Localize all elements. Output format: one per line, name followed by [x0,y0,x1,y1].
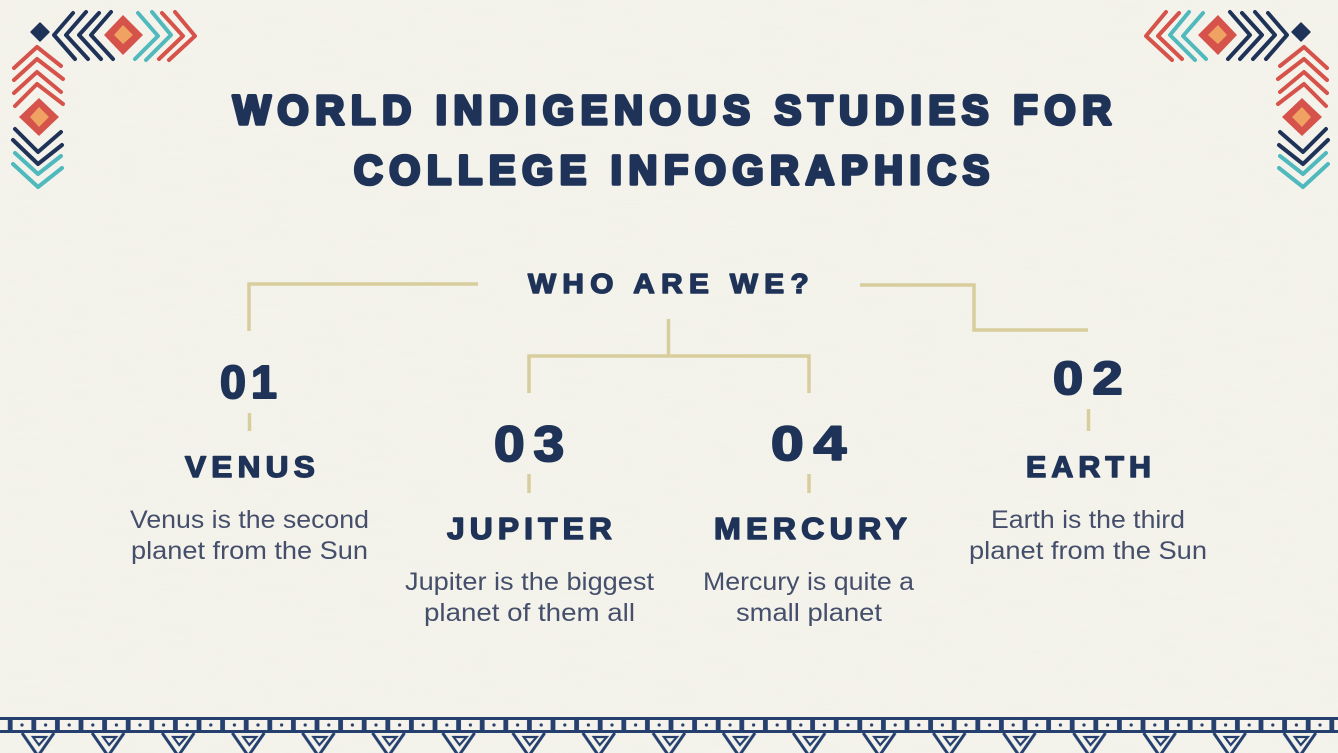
navy chevrons pointing down [13,129,62,164]
tick [527,474,531,493]
red chevrons pointing right [159,12,195,60]
ornament: top right corner [1146,12,1328,187]
description Jupiter: Jupiter is the biggest [405,568,654,596]
row of triangles [0,732,1338,753]
title line 1: WORLD INDIGENOUS STUDIES FOR [233,87,1118,133]
red chevrons pointing up [14,47,63,106]
description Earth: planet from the Sun [969,537,1207,565]
icon: horizontal red diamond right [1198,15,1237,55]
heading Mercury: MERCURY [714,511,912,546]
column: 03 Jupiter [405,416,654,627]
heading Venus: VENUS [185,451,320,484]
description Mercury [703,568,914,627]
connector: right branch to 02 [860,285,1088,330]
teal chevrons pointing down [13,153,62,187]
number 01: 01 [220,356,282,408]
ornament: bottom border [0,717,1338,753]
heading Jupiter: JUPITER [447,511,617,546]
description Mercury: small planet [736,599,882,627]
subtitle: who are we: WHO ARE WE? [528,268,815,299]
description Jupiter: planet of them all [424,599,635,627]
tick [1087,409,1090,431]
teal chevrons pointing left [1170,12,1206,60]
column: 02 Earth [969,352,1207,565]
tick [807,474,811,493]
connector: middle branch to 03 and 04 [529,356,809,393]
title [233,87,1118,193]
navy chevrons pointing right [1228,12,1287,59]
icon: vertical red diamond [19,98,59,136]
number 02: 02 [1053,352,1132,404]
teal chevrons pointing down right [1279,153,1328,187]
icon: small navy diamond [31,23,49,41]
description Venus [130,506,369,565]
tick [248,413,251,431]
band of dotted squares [0,717,1338,733]
red chevrons pointing left [1146,12,1182,60]
description Earth [969,506,1207,565]
icon: horizontal red diamond [104,15,143,55]
column: 04 Mercury [703,418,914,627]
number 04: 04 [771,418,856,471]
description Jupiter [405,568,654,627]
icon: small navy diamond right [1292,23,1310,41]
description Venus: Venus is the second [130,506,369,534]
red chevrons pointing up right [1278,47,1327,106]
ornament: top left corner [13,12,195,187]
heading Earth: EARTH [1026,451,1156,484]
teal chevrons pointing right [135,12,171,60]
icon: vertical red diamond right [1282,98,1322,136]
number 03: 03 [494,416,573,472]
navy chevrons pointing down right [1279,129,1328,164]
connector: left branch to 01 [249,284,478,331]
navy chevrons pointing left [54,12,113,59]
connector: middle stem [667,319,670,356]
column: 01 Venus [130,356,369,565]
description Venus: planet from the Sun [131,537,368,565]
title line 2: COLLEGE INFOGRAPHICS [354,147,996,193]
description Earth: Earth is the third [991,506,1185,534]
description Mercury: Mercury is quite a [703,568,914,596]
